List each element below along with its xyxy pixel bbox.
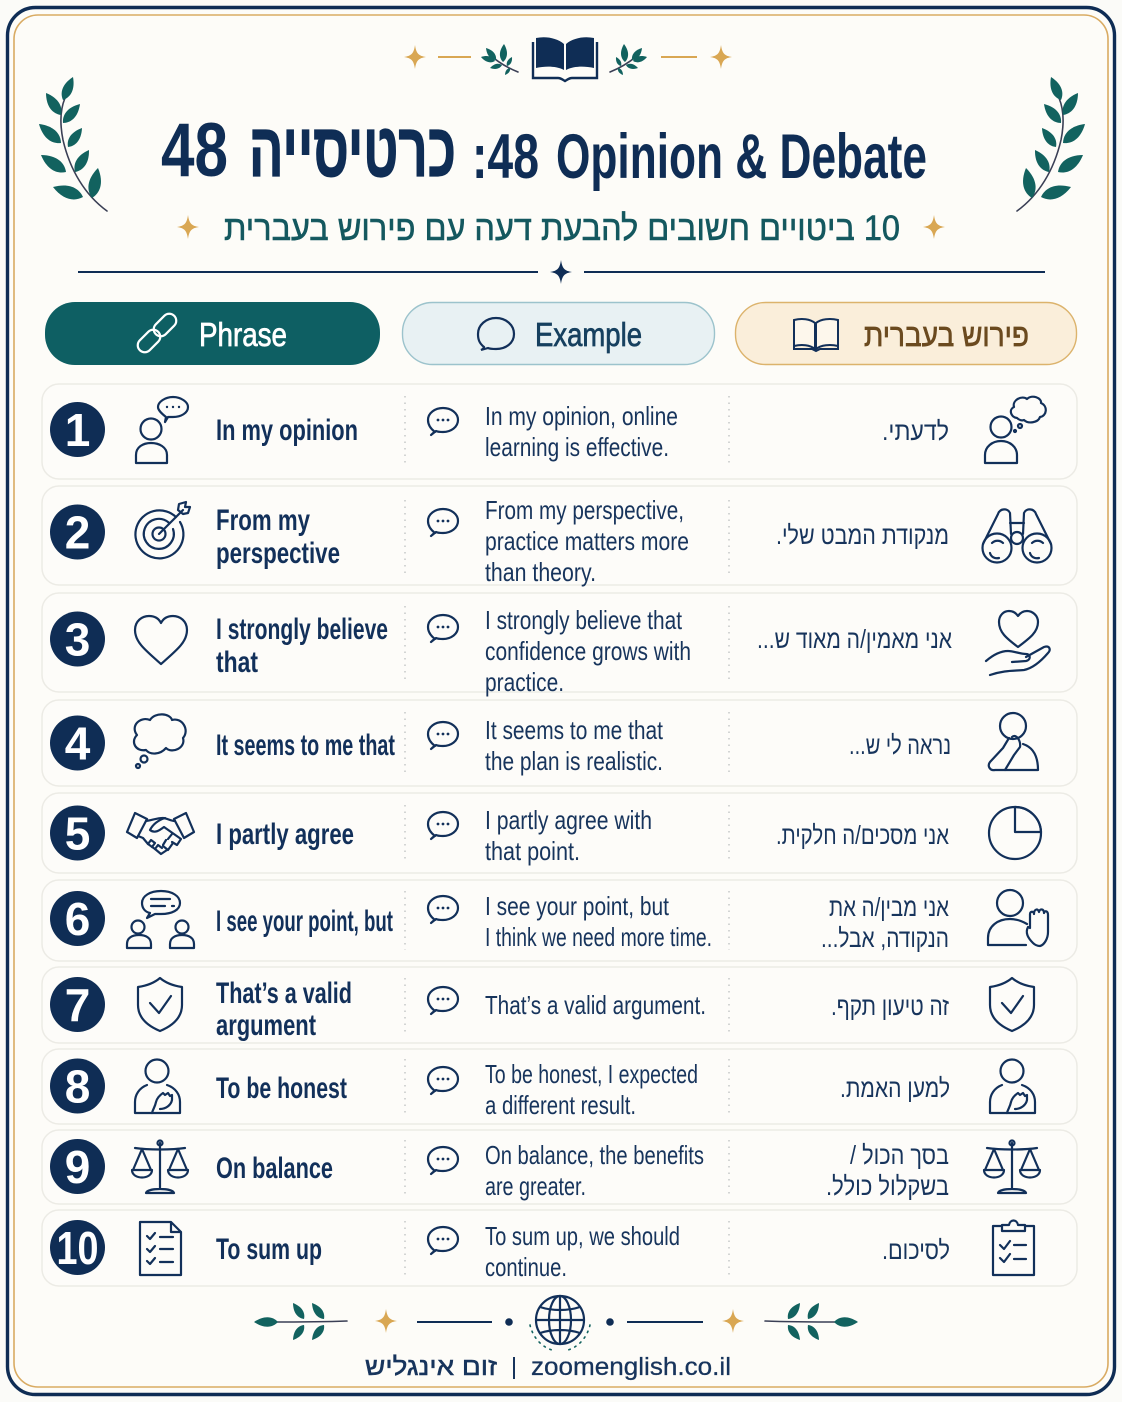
hebrew 5: אני מסכים/ה חלקית. (776, 820, 949, 850)
phrase 2: perspective (216, 537, 340, 570)
icon: handshake (127, 813, 194, 854)
number 3 (50, 612, 105, 666)
example 5: that point. (485, 836, 580, 866)
phrase 7: argument (216, 1009, 316, 1042)
example 2: practice matters more (485, 526, 689, 556)
title divider (78, 260, 1045, 284)
icon: quarter pie (989, 807, 1041, 859)
column header: Hebrew translation (736, 302, 1076, 364)
row 2 (42, 486, 1077, 587)
left laurel (35, 75, 107, 211)
example 8: a different result. (485, 1090, 636, 1120)
right laurel (1017, 75, 1089, 211)
example 1 (428, 401, 678, 462)
number 4: 4 (65, 718, 91, 770)
column header: Hebrew translation: פירוש בעברית (864, 317, 1029, 353)
number 4 (50, 716, 105, 770)
phrase 8: To be honest (216, 1072, 347, 1105)
example 10: To sum up, we should (485, 1221, 680, 1251)
phrase 9: On balance (216, 1152, 333, 1185)
phrase 7: That’s a valid (216, 977, 352, 1010)
hebrew 2: מנקודת המבט שלי. (776, 520, 949, 550)
number 10: 10 (56, 1222, 98, 1274)
example 9 (428, 1140, 704, 1201)
number 7 (50, 977, 105, 1032)
number 9 (50, 1139, 105, 1194)
number 5: 5 (65, 808, 90, 860)
hebrew 6: אני מבין/ה את (829, 892, 949, 922)
number 7: 7 (65, 979, 90, 1031)
hebrew 3: אני מאמין/ה מאוד ש... (757, 624, 952, 654)
phrase 1: In my opinion (216, 414, 358, 447)
icon: clipboard (993, 1220, 1034, 1275)
row 8 (42, 1049, 1077, 1124)
hebrew 9: בסך הכול / (850, 1140, 949, 1170)
icon: person raising hand (988, 890, 1048, 946)
number 5 (50, 806, 105, 860)
footer brand text (365, 1353, 731, 1381)
example 6: I think we need more time. (485, 922, 712, 952)
hebrew 8: למען האמת. (840, 1073, 950, 1103)
icon: shield check (138, 978, 182, 1031)
icon: open book (533, 37, 597, 81)
phrase 3 (216, 613, 388, 679)
example 7 (428, 987, 706, 1020)
number 2 (50, 504, 105, 560)
phrase 5: I partly agree (216, 818, 354, 851)
example 7: That’s a valid argument. (485, 990, 706, 1020)
title (161, 108, 927, 193)
icon: checklist document (140, 1222, 181, 1275)
footer brand text: zoomenglish.co.il (531, 1353, 731, 1381)
number 9: 9 (65, 1141, 90, 1193)
row 5 (42, 793, 1077, 873)
footer ornament (254, 1301, 858, 1342)
example 3 (428, 605, 691, 697)
hebrew 4: נראה לי ש... (849, 730, 951, 760)
example 4 (428, 715, 664, 776)
number 6 (50, 891, 105, 946)
icon: person pondering (989, 713, 1038, 770)
title: 48 (161, 108, 228, 193)
phrase 6: I see your point, but (216, 905, 393, 938)
row 4 (42, 700, 1077, 786)
example 10 (428, 1221, 680, 1282)
icon: target with arrow (135, 502, 190, 558)
icon: scales (132, 1140, 188, 1193)
icon: hand on heart (135, 1060, 180, 1113)
icon: scales right (984, 1140, 1040, 1193)
example 2: From my perspective, (485, 495, 684, 525)
example 2: than theory. (485, 557, 596, 587)
row 7 (42, 967, 1077, 1043)
example 4: the plan is realistic. (485, 746, 663, 776)
example 9: On balance, the benefits (485, 1140, 704, 1170)
example 1: learning is effective. (485, 432, 669, 462)
icon: person thinking (985, 397, 1046, 463)
phrase 7 (216, 977, 352, 1042)
example 4: It seems to me that (485, 715, 664, 745)
number 1 (50, 402, 105, 457)
number 6: 6 (65, 893, 90, 945)
icon: binoculars (982, 509, 1052, 562)
example 5: I partly agree with (485, 805, 652, 835)
hebrew 9: בשקלול כולל. (826, 1171, 949, 1201)
example 8 (428, 1059, 698, 1120)
icon: heart (135, 616, 187, 664)
example 6 (428, 891, 712, 952)
hebrew 6: הנקודה, אבל... (821, 923, 949, 953)
column header: Example (402, 302, 714, 364)
phrase 3: I strongly believe (216, 613, 388, 646)
footer brand text: זום אינגליש (365, 1353, 497, 1381)
icon: globe (530, 1296, 590, 1350)
hebrew 7: זה טיעון תקף. (831, 991, 949, 1021)
icon: two people talking (127, 891, 194, 948)
hebrew 9 (826, 1140, 949, 1201)
example 5 (428, 805, 652, 866)
example 1: In my opinion, online (485, 401, 678, 431)
number 2: 2 (65, 506, 90, 558)
example 3: confidence grows with (485, 636, 691, 666)
icon: shield check right (990, 978, 1034, 1031)
column header: Phrase (45, 302, 380, 365)
number 8: 8 (65, 1060, 90, 1112)
top ornament (404, 44, 732, 76)
example 3: I strongly believe that (485, 605, 683, 635)
column header: Example: Example (535, 316, 642, 353)
title: כרטיסייה (249, 108, 456, 193)
row 9 (42, 1130, 1077, 1204)
column header: Phrase: Phrase (199, 316, 287, 353)
phrase 3: that (216, 646, 258, 679)
row 3 (42, 593, 1077, 697)
phrase 2: From my (216, 504, 310, 537)
example 9: are greater. (485, 1171, 586, 1201)
row 6 (42, 880, 1077, 961)
icon: person with speech bubble (136, 397, 188, 463)
example 8: To be honest, I expected (485, 1059, 698, 1089)
phrase 2 (216, 504, 340, 570)
phrase 4: It seems to me that (216, 729, 395, 762)
hebrew 6 (821, 892, 949, 953)
row 1 (42, 384, 1077, 479)
number 8 (50, 1058, 105, 1114)
title: :48 (472, 122, 539, 192)
row 10 (42, 1210, 1077, 1286)
subtitle: 10 ביטויים חשובים להבעת דעה עם פירוש בעברית (224, 209, 900, 248)
number 1: 1 (65, 404, 90, 456)
icon: hand on heart right (990, 1060, 1035, 1113)
example 6: I see your point, but (485, 891, 670, 921)
title: Opinion & Debate (556, 122, 927, 192)
example 2 (428, 495, 689, 587)
example 10: continue. (485, 1252, 567, 1282)
phrase 10: To sum up (216, 1233, 322, 1266)
hebrew 1: לדעתי. (882, 416, 949, 446)
hebrew 10: לסיכום. (882, 1235, 950, 1265)
example 3: practice. (485, 667, 564, 697)
number 3: 3 (65, 614, 90, 666)
icon: thought cloud (134, 714, 186, 768)
icon: heart in hand (986, 611, 1050, 675)
